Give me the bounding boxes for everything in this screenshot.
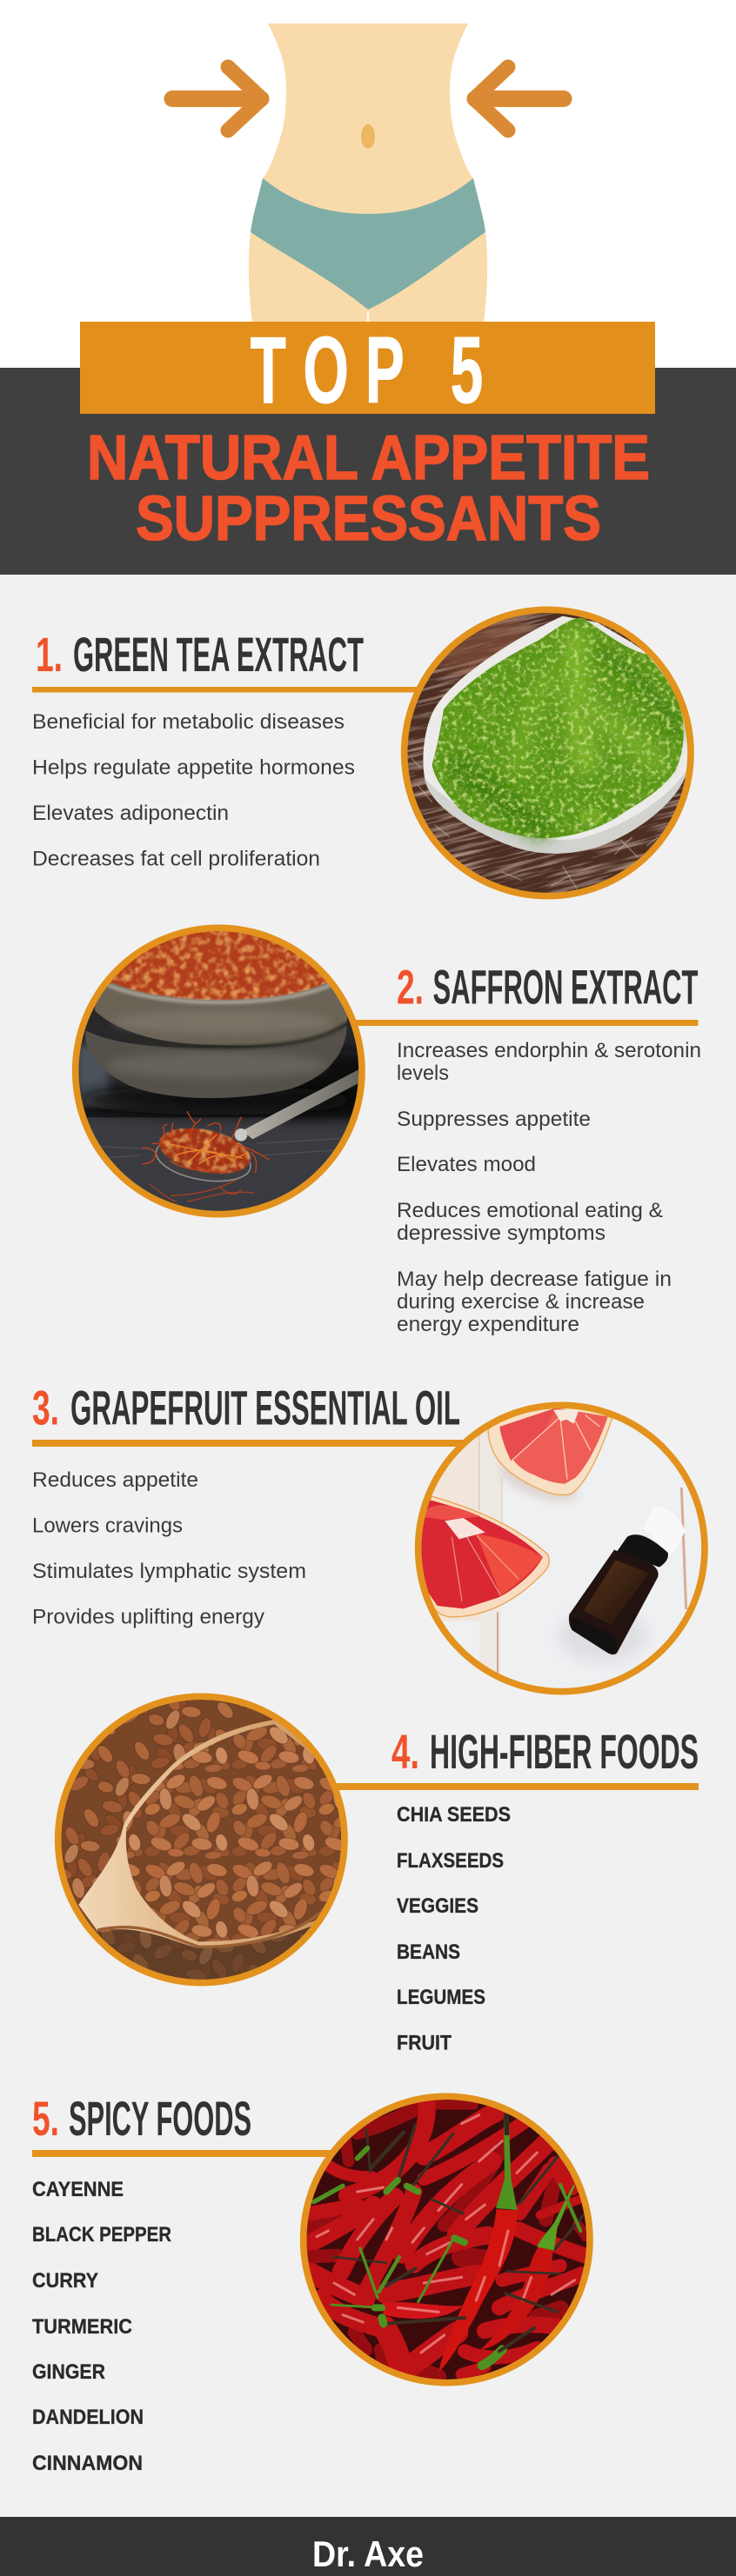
foods list: CINNAMON bbox=[32, 2452, 143, 2475]
photo: saffron in stone bowl and spoon bbox=[71, 923, 376, 1219]
illustration: torso bbox=[249, 23, 487, 323]
panel: high-fiber foods bbox=[54, 1692, 699, 2055]
dark title band bbox=[0, 368, 736, 575]
benefits list: Suppresses appetite bbox=[397, 1108, 591, 1131]
icon: right arrow bbox=[474, 67, 564, 130]
benefits list: May help decrease fatigue in bbox=[397, 1268, 672, 1291]
benefits list: Decreases fat cell proliferation bbox=[32, 847, 320, 871]
panel: green tea extract bbox=[32, 607, 694, 899]
white top area bbox=[0, 0, 736, 368]
panel: grapefruit essential oil bbox=[32, 1381, 710, 1696]
photo: flaxseeds on wooden spoon bbox=[54, 1692, 350, 1987]
heading: GREEN TEA EXTRACT bbox=[73, 627, 364, 682]
foods list: LEGUMES bbox=[397, 1986, 485, 2009]
benefits list: Elevates adiponectin bbox=[32, 802, 229, 825]
foods list: FRUIT bbox=[397, 2031, 452, 2055]
heading: 3. bbox=[32, 1381, 59, 1434]
benefits list: Elevates mood bbox=[397, 1153, 536, 1176]
benefits list: Beneficial for metabolic diseases bbox=[32, 710, 345, 734]
benefits list bbox=[397, 1039, 701, 1336]
title: NATURAL APPETITE bbox=[87, 423, 650, 493]
benefits list: during exercise & increase bbox=[397, 1290, 645, 1314]
heading: 1. bbox=[36, 627, 63, 682]
benefits list: Helps regulate appetite hormones bbox=[32, 756, 355, 779]
photo: green tea powder in white dish bbox=[400, 607, 694, 899]
title bbox=[87, 423, 650, 554]
panel: spicy foods bbox=[32, 2091, 595, 2475]
footer bbox=[0, 2517, 736, 2576]
benefits list: Stimulates lymphatic system bbox=[32, 1560, 306, 1583]
foods list: BLACK PEPPER bbox=[32, 2223, 171, 2247]
photo: red chili peppers bbox=[299, 2092, 595, 2387]
foods list: VEGGIES bbox=[397, 1894, 478, 1918]
panel: saffron extract bbox=[71, 923, 701, 1336]
banner: top 5: TOP 5 bbox=[251, 318, 483, 423]
foods list bbox=[397, 1803, 511, 2055]
heading bbox=[32, 1381, 460, 1434]
heading bbox=[32, 2091, 251, 2146]
photo: grapefruit wedges and oil bottle bbox=[414, 1395, 710, 1696]
foods list: FLAXSEEDS bbox=[397, 1849, 504, 1873]
foods list: TURMERIC bbox=[32, 2315, 132, 2339]
benefits list: energy expenditure bbox=[397, 1313, 579, 1336]
heading: 4. bbox=[391, 1724, 419, 1779]
heading bbox=[36, 627, 364, 682]
benefits list: levels bbox=[397, 1062, 449, 1085]
foods list: CAYENNE bbox=[32, 2178, 124, 2201]
foods list: CURRY bbox=[32, 2269, 98, 2293]
benefits list: depressive symptoms bbox=[397, 1221, 606, 1245]
benefits list: Lowers cravings bbox=[32, 1514, 183, 1537]
heading: 2. bbox=[397, 960, 424, 1014]
benefits list: Provides uplifting energy bbox=[32, 1605, 264, 1629]
foods list: BEANS bbox=[397, 1940, 460, 1964]
foods list bbox=[32, 2178, 171, 2475]
benefits list: Increases endorphin & serotonin bbox=[397, 1039, 701, 1062]
heading: SPICY FOODS bbox=[69, 2091, 251, 2146]
foods list: DANDELION bbox=[32, 2406, 144, 2429]
benefits list bbox=[32, 1468, 306, 1629]
heading: 5. bbox=[32, 2091, 59, 2146]
foods list: CHIA SEEDS bbox=[397, 1803, 511, 1827]
icon: left arrow bbox=[172, 67, 262, 130]
title: SUPPRESSANTS bbox=[136, 484, 601, 554]
banner: top 5 bbox=[80, 318, 655, 423]
header panel bbox=[0, 0, 736, 575]
foods list: GINGER bbox=[32, 2360, 105, 2384]
benefits list: Reduces appetite bbox=[32, 1468, 198, 1492]
brand name: Dr. Axe bbox=[312, 2533, 424, 2574]
benefits list: Reduces emotional eating & bbox=[397, 1199, 663, 1222]
benefits list bbox=[32, 710, 355, 871]
